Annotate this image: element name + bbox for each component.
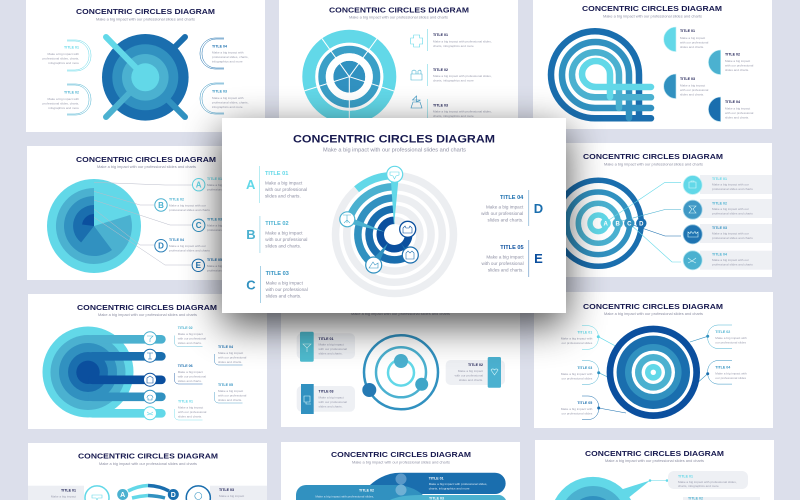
letter markers: D bbox=[639, 222, 644, 228]
callout: title 04: TITLE 04 bbox=[212, 44, 227, 48]
marker: B: B bbox=[158, 201, 164, 210]
card: title 01: slides and charts. bbox=[318, 352, 343, 356]
callout: title 01: TITLE 01 bbox=[678, 474, 693, 478]
block A: title 01: Make a big impact bbox=[265, 180, 303, 186]
list item: title 01: TITLE 01 bbox=[433, 33, 448, 37]
note: title 01: TITLE 01 bbox=[178, 400, 193, 404]
grey bands bbox=[28, 486, 267, 500]
block D: title 04: TITLE 04 bbox=[500, 195, 524, 201]
heading: CONCENTRIC CIRCLES DIAGRAM bbox=[583, 152, 723, 161]
callout: title 04: our professional slides bbox=[715, 376, 747, 380]
item: title 02: professional slides and charts bbox=[712, 212, 753, 216]
card: title 02 bbox=[446, 357, 505, 388]
callout: title 03: TITLE 03 bbox=[577, 366, 592, 370]
band text bbox=[51, 488, 244, 498]
panel: slide top middle, segmented rings bbox=[279, 0, 518, 124]
nodes bbox=[362, 354, 428, 397]
diagram: rings bbox=[364, 335, 438, 409]
heading: CONCENTRIC CIRCLES DIAGRAM bbox=[329, 6, 469, 14]
list item: title 01: charts, infographics and more bbox=[433, 44, 474, 48]
subtitle: Make a big impact with our professional slides and charts bbox=[351, 312, 450, 316]
callout: title 03: slides and charts. bbox=[680, 92, 704, 96]
letter markers: C bbox=[627, 222, 632, 228]
card: title 03: TITLE 03 bbox=[318, 390, 333, 394]
note: title 02: slides and charts. bbox=[178, 341, 202, 345]
diagram: nested arches bbox=[551, 31, 651, 118]
item: title 03: TITLE 03 bbox=[712, 226, 727, 230]
note: title 01: with our professional bbox=[178, 410, 207, 414]
card: title 02: with our professional bbox=[455, 374, 483, 378]
pill: title 03 bbox=[390, 495, 506, 500]
pill: title 02 bbox=[296, 484, 428, 500]
band text: Make a big impact bbox=[219, 494, 244, 498]
block A: title 01: slides and charts. bbox=[265, 194, 301, 198]
callout: title 03: infographics and more bbox=[212, 105, 243, 109]
item: title 04 bbox=[683, 251, 753, 270]
callout: title 01: professional slides, charts, bbox=[43, 56, 79, 60]
block E: title 05: with our professional bbox=[481, 261, 524, 266]
panel: slide third row right, bullseye bbox=[534, 292, 773, 428]
panel: slide bottom left, arcs with letters bbox=[28, 443, 267, 500]
callout: title 02: slides and charts. bbox=[725, 68, 749, 72]
icon circles and letters: A bbox=[120, 492, 125, 499]
band text: TITLE 01 bbox=[61, 488, 76, 492]
marker: A: professional bbox=[207, 188, 224, 192]
callout: title 01: infographics and more bbox=[48, 61, 79, 65]
panel: slide top left, target with crossing bars bbox=[26, 0, 265, 132]
callout: title 04: TITLE 04 bbox=[725, 100, 740, 104]
connectors bbox=[606, 182, 681, 262]
heading: CONCENTRIC CIRCLES DIAGRAM bbox=[293, 134, 495, 146]
callout: title 04: Make a big impact with bbox=[715, 372, 747, 376]
note: title 05: slides and charts. bbox=[218, 398, 242, 402]
callout: title 02: with our professional bbox=[725, 64, 754, 68]
band text: TITLE 03 bbox=[219, 488, 234, 492]
panel: slide third row left, circles with bars bbox=[28, 294, 267, 429]
marker: B bbox=[155, 198, 210, 212]
callout: title 03: Make a big impact with bbox=[561, 372, 593, 376]
marker: C: professional bbox=[207, 228, 224, 232]
callout: title 01: charts, infographics and more bbox=[678, 484, 719, 488]
block A: title 01: A bbox=[246, 177, 256, 192]
callout: title 02 bbox=[706, 325, 747, 349]
icon nodes bbox=[144, 332, 156, 420]
marker: D bbox=[155, 238, 210, 252]
block D: title 04 bbox=[481, 190, 543, 226]
marker: A bbox=[192, 177, 224, 192]
subtitle: Make a big impact with our professional slides and charts bbox=[349, 16, 448, 20]
diagram: circles with bars bbox=[42, 326, 166, 418]
note: title 01: slides and charts. bbox=[178, 414, 202, 418]
band text: Make a big impact bbox=[51, 494, 76, 498]
note: title 05: TITLE 05 bbox=[218, 383, 233, 387]
note: title 02 bbox=[174, 326, 206, 346]
card: title 01: Make a big impact bbox=[318, 342, 344, 346]
block A: title 01: TITLE 01 bbox=[265, 171, 288, 177]
note: title 06 bbox=[174, 364, 206, 384]
list item: title 02: Make a big impact with professional slides, bbox=[433, 74, 492, 78]
item: title 01: TITLE 01 bbox=[712, 177, 727, 181]
shadow behind centre slide bbox=[222, 130, 566, 325]
callout: title 03 bbox=[561, 361, 600, 384]
list item: title 03 bbox=[411, 96, 492, 118]
diagram: segmented rings bbox=[304, 36, 394, 124]
note: title 06: with our professional bbox=[178, 374, 206, 378]
marker: D: D bbox=[158, 242, 164, 251]
note: title 01 bbox=[174, 400, 207, 420]
callout: title 04: professional slides, charts, bbox=[212, 55, 249, 59]
note: title 02: with our professional bbox=[178, 336, 206, 340]
chart: radial progress rings bbox=[336, 166, 454, 294]
callout: title 01: with our professional bbox=[680, 40, 709, 44]
block E: title 05: TITLE 05 bbox=[500, 245, 524, 251]
callout: title 01: Make a big impact with professional slides, bbox=[678, 480, 737, 484]
pointer bbox=[620, 479, 668, 499]
chart: stepped pie bbox=[47, 179, 141, 273]
callout: title 04: Make a big impact with bbox=[212, 50, 244, 54]
list item: title 03: charts, infographics and more bbox=[433, 114, 474, 118]
icon circles and letters bbox=[85, 486, 210, 500]
marker: A: Make a big bbox=[207, 183, 222, 187]
callout: title 03: TITLE 03 bbox=[212, 90, 227, 94]
subtitle: Make a big impact with our professional slides and charts bbox=[604, 312, 703, 316]
note: title 04 bbox=[214, 345, 247, 365]
marker: B: TITLE 02 bbox=[169, 198, 184, 202]
callout: title 02 bbox=[43, 84, 91, 115]
callout: title 05: TITLE 05 bbox=[577, 401, 592, 405]
icon: node D bbox=[402, 247, 418, 263]
callout: title 01: Make a big impact with bbox=[48, 52, 79, 56]
callout: title 04 bbox=[200, 38, 249, 69]
callout: title 02 bbox=[683, 496, 760, 500]
callout: title 04: TITLE 04 bbox=[715, 366, 730, 370]
marker: A: TITLE 01 bbox=[207, 177, 222, 181]
icon: node A bbox=[387, 166, 403, 182]
heading: CONCENTRIC CIRCLES DIAGRAM bbox=[76, 7, 215, 16]
marker: C bbox=[192, 218, 224, 232]
callout: title 03: Make a big impact with bbox=[212, 96, 244, 100]
marker: E: professional bbox=[207, 268, 224, 272]
subtitle: Make a big impact with our professional slides and charts bbox=[323, 148, 466, 154]
note: title 04: TITLE 04 bbox=[218, 345, 233, 349]
marker: E: E bbox=[196, 261, 202, 270]
marker: D: professional slides and charts bbox=[169, 248, 210, 252]
block C: title 03 bbox=[246, 266, 308, 303]
card: title 01: TITLE 01 bbox=[318, 337, 333, 341]
marker: E: Make a big bbox=[207, 264, 222, 268]
heading: CONCENTRIC CIRCLES DIAGRAM bbox=[77, 303, 217, 312]
callout: title 02: infographics and more bbox=[48, 106, 79, 110]
block E: title 05: Make a big impact bbox=[486, 254, 524, 260]
item: title 01 bbox=[683, 176, 753, 194]
callout: title 05: our professional slides bbox=[562, 412, 593, 416]
callout: title 01 bbox=[561, 326, 600, 349]
marker: E bbox=[192, 258, 224, 272]
item: title 03: Make a big impact with our bbox=[712, 232, 749, 236]
callout: title 04: infographics and more bbox=[212, 60, 243, 64]
callout: title 02: Make a big impact bbox=[725, 59, 750, 63]
item: title 04: Make a big impact with our bbox=[712, 258, 749, 262]
diagram: target with bars bbox=[102, 34, 189, 121]
list item: title 02: charts, infographics and more bbox=[433, 78, 474, 82]
marker: C: C bbox=[196, 221, 202, 230]
item: title 02: Make a big impact with our bbox=[712, 207, 749, 211]
note: title 04: slides and charts. bbox=[218, 360, 242, 364]
marker: D: Make a big impact with our bbox=[169, 244, 206, 248]
block A: title 01 bbox=[246, 166, 307, 203]
block B: title 02: with our professional bbox=[265, 237, 307, 242]
block D: title 04: Make a big impact bbox=[486, 204, 524, 210]
pill: title 01: TITLE 01 bbox=[429, 476, 444, 480]
panel: main centre slide bbox=[222, 118, 566, 313]
callout: title 05 bbox=[561, 396, 600, 420]
card: title 01 bbox=[297, 332, 355, 362]
marker: B: Make a big impact with our bbox=[169, 204, 206, 208]
callout: title 04: slides and charts. bbox=[725, 116, 749, 120]
callout: title 03: Make a big impact bbox=[680, 84, 705, 88]
marker: D: TITLE 04 bbox=[169, 238, 184, 242]
list item: title 02: TITLE 02 bbox=[433, 68, 448, 72]
row panels bbox=[700, 175, 772, 270]
note: title 06: TITLE 06 bbox=[178, 364, 193, 368]
callout: title 02: our professional slides bbox=[715, 340, 747, 344]
note: title 01: Make a big impact bbox=[178, 406, 203, 410]
marker: A: A bbox=[196, 181, 202, 190]
block C: title 03: TITLE 03 bbox=[266, 271, 289, 277]
heading: CONCENTRIC CIRCLES DIAGRAM bbox=[78, 452, 218, 460]
icon: node B bbox=[340, 212, 355, 227]
note: title 04: Make a big impact bbox=[218, 351, 243, 355]
callout: title 01 bbox=[668, 471, 748, 489]
subtitle: Make a big impact with our professional slides and charts bbox=[604, 162, 703, 166]
subtitle: Make a big impact with our professional slides and charts bbox=[96, 18, 195, 22]
arcs bbox=[128, 486, 169, 498]
subtitle: Make a big impact with our professional slides and charts bbox=[98, 313, 197, 317]
block B: title 02: B bbox=[246, 227, 256, 242]
note: title 02: TITLE 02 bbox=[178, 326, 193, 330]
subtitle: Make a big impact with our professional slides and charts bbox=[605, 459, 704, 463]
block E: title 05: slides and charts. bbox=[488, 268, 524, 272]
list item: title 01: Make a big impact with professional slides, bbox=[433, 40, 492, 44]
item: title 03 bbox=[683, 225, 753, 244]
callout: title 02: TITLE 02 bbox=[725, 52, 740, 56]
panel: slide second row right, rings with letters bbox=[533, 143, 772, 277]
note: title 02: Make a big impact bbox=[178, 332, 203, 336]
block C: title 03: with our professional bbox=[266, 287, 308, 292]
heading: CONCENTRIC CIRCLES DIAGRAM bbox=[585, 449, 724, 458]
callout: title 04: with our professional bbox=[725, 111, 754, 115]
block C: title 03: slides and charts. bbox=[266, 294, 301, 298]
heading: CONCENTRIC CIRCLES DIAGRAM bbox=[582, 4, 722, 13]
panel: slide third row middle, rings with nodes bbox=[281, 300, 520, 427]
card: title 02: Make a big impact bbox=[458, 369, 483, 373]
icon: node E bbox=[400, 221, 416, 237]
item: title 03: professional slides and charts bbox=[712, 236, 753, 240]
diagram: bullseye bbox=[607, 326, 700, 419]
wedges bbox=[347, 174, 413, 267]
block B: title 02: Make a big impact bbox=[265, 230, 303, 236]
callout: title 01 bbox=[664, 27, 709, 52]
icon: node C bbox=[366, 257, 382, 273]
block C: title 03: C bbox=[246, 278, 256, 292]
block B: title 02: TITLE 02 bbox=[265, 221, 289, 227]
marker: C: Make a big bbox=[207, 224, 222, 228]
item: title 02 bbox=[683, 200, 753, 219]
block B: title 02 bbox=[246, 216, 307, 253]
note: title 05: with our professional bbox=[218, 394, 247, 398]
subtitle: Make a big impact with our professional slides and charts bbox=[352, 460, 450, 464]
callout: title 04 bbox=[708, 97, 754, 122]
callout: title 01 bbox=[43, 40, 91, 71]
letter markers: B bbox=[616, 222, 621, 228]
card: title 03: Make a big impact bbox=[318, 396, 344, 400]
callout: title 05: Make a big impact with bbox=[561, 407, 593, 411]
panel: slide bottom right, dome with callout bbox=[535, 440, 774, 500]
callout: title 01: Make a big impact bbox=[680, 36, 705, 40]
subtitle: Make a big impact with our professional slides and charts bbox=[603, 14, 702, 18]
diagram: rings bbox=[555, 180, 641, 266]
marker: E: TITLE 05 bbox=[207, 258, 222, 262]
callout: title 02: Make a big impact with bbox=[48, 97, 79, 101]
pill: title 01: charts, infographics and more bbox=[429, 486, 470, 490]
coloured arcs bbox=[349, 176, 410, 266]
note: title 04: with our professional bbox=[218, 356, 247, 360]
letter markers: A bbox=[604, 222, 609, 228]
callout: title 02: professional slides, charts, bbox=[43, 102, 79, 106]
callout: title 03: our professional slides bbox=[562, 376, 593, 380]
connectors bbox=[598, 336, 708, 413]
pill: title 01: Make a big impact with professional slides, bbox=[429, 482, 487, 486]
dome bbox=[555, 477, 631, 500]
callout: title 03 bbox=[664, 74, 709, 99]
note: title 05 bbox=[214, 383, 247, 403]
callout: title 03 bbox=[200, 83, 249, 114]
callout: title 02: Make a big impact with bbox=[715, 336, 747, 340]
list item: title 03: TITLE 03 bbox=[433, 104, 448, 108]
callout: title 02: TITLE 02 bbox=[64, 90, 79, 94]
callout: title 02: TITLE 02 bbox=[715, 330, 730, 334]
list item: title 02 bbox=[411, 64, 492, 86]
list item: title 01 bbox=[411, 29, 492, 51]
pill: title 02: TITLE 02 bbox=[359, 488, 374, 492]
callout: title 01: Make a big impact with bbox=[561, 336, 593, 340]
card: title 03: with our professional bbox=[318, 400, 347, 404]
card: title 02: slides and charts. bbox=[459, 378, 483, 382]
block D: title 04: D bbox=[534, 201, 543, 216]
item: title 02: TITLE 02 bbox=[712, 202, 727, 206]
item: title 01: professional slides and charts bbox=[712, 187, 753, 191]
panel: slide bottom middle, overlapping pills bbox=[281, 442, 520, 500]
card: title 03 bbox=[297, 384, 355, 414]
callout: title 01: TITLE 01 bbox=[64, 46, 79, 50]
callout: title 01: our professional slides bbox=[562, 341, 593, 345]
card: title 01: with our professional bbox=[318, 347, 347, 351]
heading: CONCENTRIC CIRCLES DIAGRAM bbox=[331, 450, 471, 459]
callout: title 03: with our professional bbox=[680, 88, 709, 92]
block E: title 05 bbox=[481, 240, 543, 277]
note: title 06: slides and charts. bbox=[178, 379, 202, 383]
callout: title 04: Make a big impact bbox=[725, 106, 750, 110]
panel: slide top right, nested arches bbox=[533, 0, 772, 129]
block B: title 02: slides and charts. bbox=[265, 244, 301, 248]
callout: title 02 bbox=[708, 50, 754, 75]
note: title 06: Make a big impact bbox=[178, 370, 203, 374]
pill: title 01 bbox=[370, 473, 506, 494]
heading: CONCENTRIC CIRCLES DIAGRAM bbox=[583, 302, 723, 311]
block D: title 04: slides and charts. bbox=[488, 218, 523, 222]
note: title 05: Make a big impact bbox=[218, 389, 243, 393]
block C: title 03: Make a big impact bbox=[266, 280, 304, 286]
card: title 03: slides and charts. bbox=[318, 404, 343, 408]
list item: title 03: Make a big impact with professional slides, bbox=[433, 110, 492, 114]
item: title 04: professional slides and charts bbox=[712, 262, 753, 266]
block D: title 04: with our professional bbox=[481, 211, 523, 216]
leader lines bbox=[94, 182, 192, 265]
letter markers bbox=[600, 218, 646, 228]
marker: C: TITLE 03 bbox=[207, 218, 222, 222]
block E: title 05: E bbox=[534, 251, 543, 266]
item: title 04: TITLE 04 bbox=[712, 252, 727, 256]
icon circles and letters: D bbox=[171, 492, 176, 499]
card: title 02: TITLE 02 bbox=[468, 363, 483, 367]
item: title 01: Make a big impact with our bbox=[712, 182, 749, 186]
callout: title 01: TITLE 01 bbox=[680, 29, 695, 33]
subtitle: Make a big impact with our professional slides and charts bbox=[99, 462, 197, 466]
callout: title 01: slides and charts. bbox=[680, 45, 704, 49]
callout: title 04 bbox=[706, 360, 747, 384]
subtitle: Make a big impact with our professional slides and charts bbox=[97, 165, 196, 169]
panel: slide second row left, stepped pie bbox=[27, 146, 266, 280]
callout: title 03: TITLE 03 bbox=[680, 77, 695, 81]
grey track rings bbox=[336, 176, 454, 294]
block A: title 01: with our professional bbox=[265, 187, 307, 192]
heading: CONCENTRIC CIRCLES DIAGRAM bbox=[76, 155, 216, 164]
callout: title 01: TITLE 01 bbox=[577, 330, 592, 334]
marker: B: professional slides and charts bbox=[169, 208, 210, 212]
pill: title 02: Make a big impact with professional slides, bbox=[315, 494, 374, 498]
callout: title 03: professional slides, charts, bbox=[212, 100, 249, 104]
